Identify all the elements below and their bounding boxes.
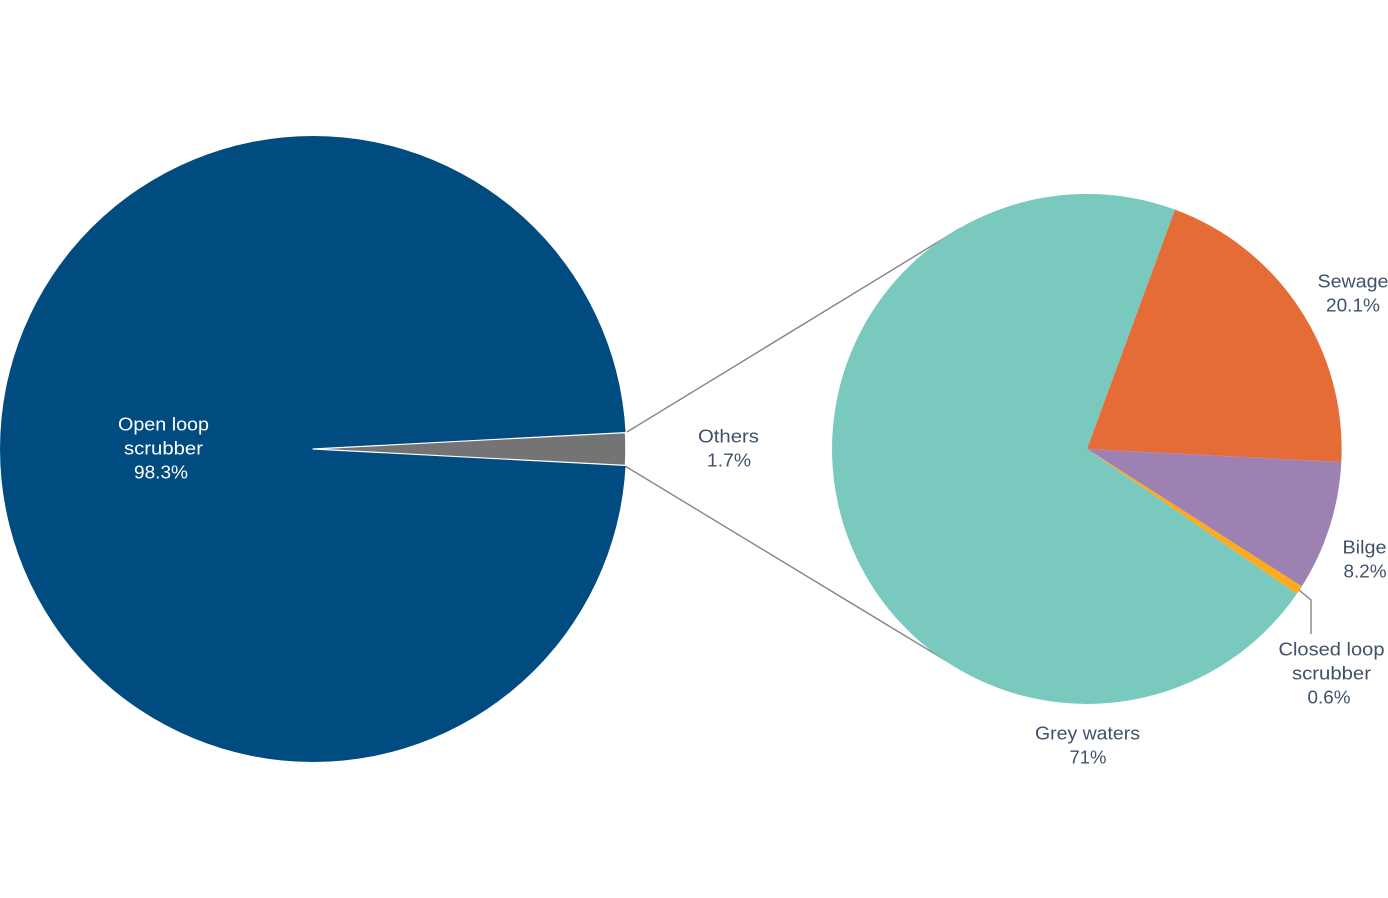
- label: sewage: 20.1%: [1326, 296, 1380, 316]
- label: others: 1.7%: [707, 450, 751, 470]
- slice: bilge: [1087, 449, 1341, 586]
- slice: grey waters: [832, 194, 1297, 704]
- label: open loop scrubber: 98.3%: [134, 462, 188, 482]
- label: closed loop scrubber: Closed loop: [1278, 640, 1384, 660]
- secondary pie: [832, 194, 1342, 704]
- label: others: Others: [698, 426, 759, 446]
- connector lines between pies: [625, 228, 960, 663]
- slice: closed loop scrubber: [1087, 449, 1302, 594]
- label: sewage: Sewage: [1317, 272, 1388, 292]
- label: closed loop scrubber: scrubber: [1292, 664, 1371, 684]
- label: open loop scrubber: Open loop: [118, 414, 209, 434]
- leader line: closed loop scrubber: [1299, 590, 1311, 634]
- label: open loop scrubber: scrubber: [124, 438, 203, 458]
- label: closed loop scrubber: 0.6%: [1308, 688, 1350, 708]
- main pie: [0, 136, 626, 762]
- label: grey waters: 71%: [1070, 748, 1106, 768]
- slice: open loop scrubber: [0, 136, 626, 762]
- label: grey waters: Grey waters: [1035, 724, 1140, 744]
- slice: sewage: [1087, 210, 1342, 462]
- slice: others: [313, 433, 626, 465]
- label: bilge: Bilge: [1342, 538, 1386, 558]
- label: bilge: 8.2%: [1344, 562, 1386, 582]
